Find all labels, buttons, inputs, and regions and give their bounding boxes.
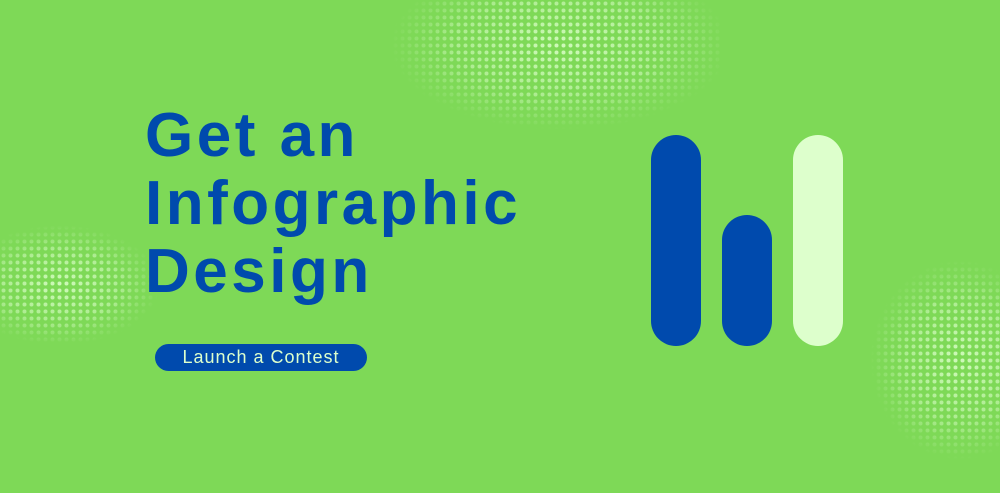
title: Infographic (145, 169, 521, 238)
icon: bar chart (651, 135, 843, 346)
bar 2 (722, 215, 772, 346)
title: Get an (145, 101, 359, 170)
swirl: right (876, 268, 1000, 454)
title (145, 101, 521, 306)
swirl: left (2, 228, 152, 341)
button: launch a contest (155, 344, 367, 371)
button: launch a contest: Launch a Contest (182, 347, 340, 367)
title: Design (145, 237, 373, 306)
bar 1 (651, 135, 701, 346)
swirl: top (401, 2, 719, 124)
bar 3 (793, 135, 843, 346)
